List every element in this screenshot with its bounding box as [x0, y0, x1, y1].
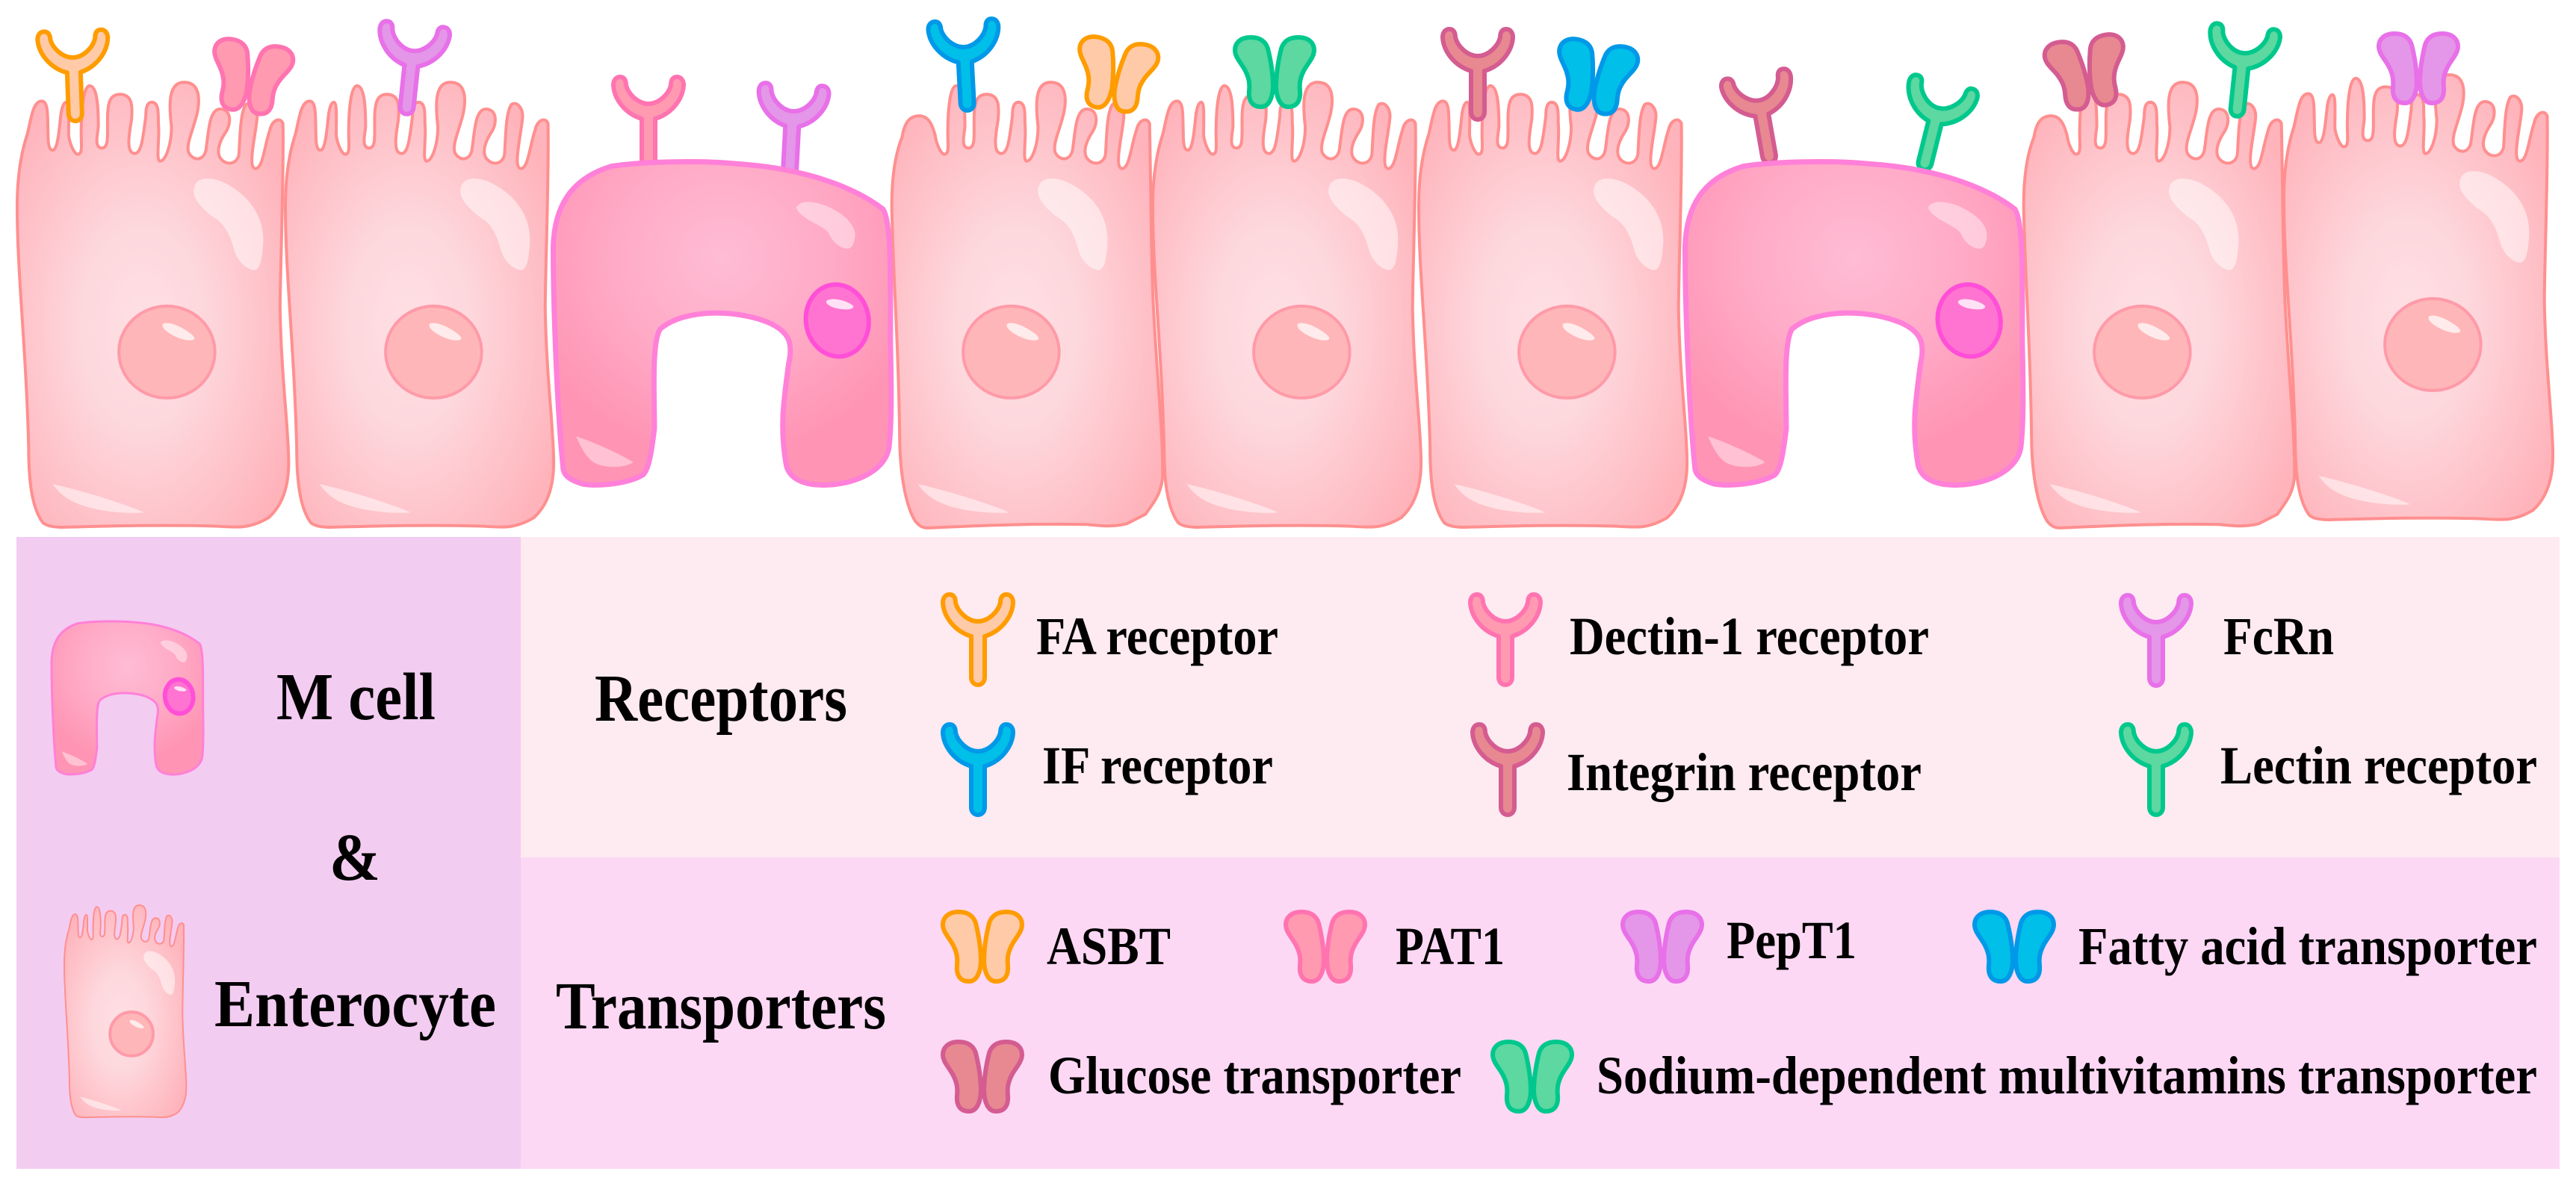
icon: sodium-dependent multivitamins transporter [1235, 37, 1314, 107]
icon: integrin receptor on M cell [1720, 68, 1805, 169]
legend: Fatty acid transporter [1975, 912, 2537, 981]
enterocyte 2 [285, 82, 554, 527]
legend: PepT1: PepT1 [1727, 910, 1857, 970]
legend: Dectin-1 receptor [1470, 594, 1929, 685]
receptors behind M cells [613, 68, 1979, 178]
M cell 1 [554, 162, 891, 485]
panel: cell types [16, 537, 521, 1169]
enterocyte 5 [1419, 82, 1687, 527]
legend: Lectin receptor [2121, 724, 2537, 815]
legend: PAT1: PAT1 [1396, 916, 1505, 976]
legend: ASBT [943, 912, 1171, 981]
icon: PepT1 transporter [2379, 34, 2458, 103]
panel: transporters [521, 857, 2560, 1169]
icon: lectin receptor on M cell [1889, 73, 1979, 178]
legend: PepT1 [1623, 910, 1857, 981]
label: M cell: M cell [276, 660, 436, 734]
enterocyte 6 [2024, 82, 2294, 528]
icon: ASBT transporter [1071, 34, 1160, 116]
label: ampersand: & [329, 821, 380, 895]
M cell 2 [1685, 162, 2023, 485]
legend: ASBT: ASBT [1047, 916, 1171, 976]
heading: Transporters: Transporters [556, 969, 886, 1043]
icon: PAT1 transporter [205, 37, 295, 118]
legend: Glucose transporter [943, 1042, 1461, 1111]
legend: Lectin receptor: Lectin receptor [2220, 736, 2537, 795]
legend: IF receptor [943, 724, 1273, 815]
legend: Integrin receptor [1473, 724, 1922, 815]
label: Enterocyte: Enterocyte [214, 967, 496, 1041]
legend: Integrin receptor: Integrin receptor [1567, 742, 1922, 802]
icon: enterocyte legend [64, 905, 186, 1117]
icon: M cell legend [52, 621, 203, 774]
legend: Dectin-1 receptor: Dectin-1 receptor [1570, 606, 1929, 666]
icon: IF receptor [928, 19, 1003, 112]
panel: receptors [521, 537, 2560, 857]
legend: FA receptor [943, 594, 1278, 685]
icon: FcRn on M cell [755, 83, 829, 176]
legend: FcRn [2121, 595, 2334, 686]
enterocyte 4 [1153, 82, 1421, 527]
icon: glucose transporter [2043, 32, 2132, 114]
cell layer: epithelium [17, 75, 2553, 528]
legend: FA receptor: FA receptor [1036, 606, 1278, 666]
surface proteins on enterocytes [37, 19, 2458, 122]
enterocyte 1 [17, 82, 288, 527]
icon: FcRn [371, 20, 451, 118]
icon: Dectin-1 receptor on M cell [613, 77, 684, 167]
icon: FA receptor [37, 29, 111, 122]
legend: FcRn: FcRn [2223, 606, 2334, 666]
icon: lectin receptor [2202, 22, 2281, 120]
legend: IF receptor: IF receptor [1042, 736, 1273, 795]
legend: PAT1 [1286, 912, 1505, 981]
legend: Fatty acid transporter: Fatty acid transporter [2078, 916, 2537, 976]
legend: Glucose transporter: Glucose transporter [1048, 1046, 1461, 1105]
enterocyte 7 [2284, 75, 2553, 520]
icon: integrin receptor [1443, 29, 1513, 119]
enterocyte 3 [892, 82, 1162, 528]
heading: Receptors: Receptors [595, 662, 847, 736]
icon: fatty acid transporter [1550, 37, 1640, 118]
